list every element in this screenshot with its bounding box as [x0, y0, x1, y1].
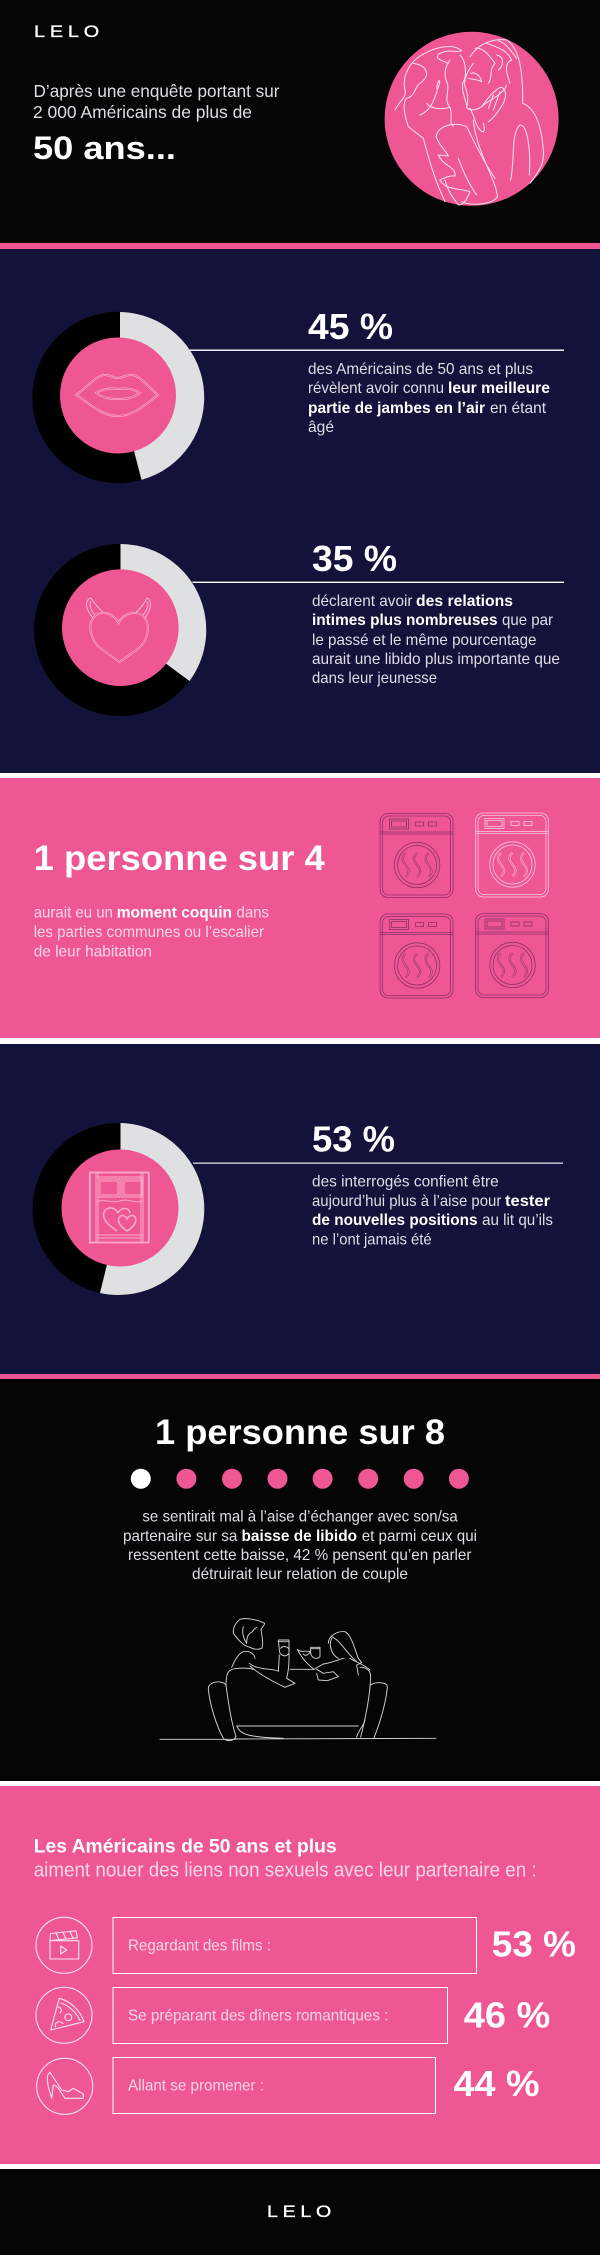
heading: 1 personne sur 4: 1 personne sur 4 — [34, 839, 325, 878]
logo: LELO: LELO — [34, 23, 104, 41]
text: moment coquin — [34, 905, 269, 961]
text: baisse de libido: détruirait leur relation de couple — [192, 1566, 408, 1583]
icon: pizza slice — [36, 1987, 92, 2043]
text: 35 % description: aurait une libido plus importante que — [312, 651, 560, 668]
label: dinners: Se préparant des dîners romantiques : — [128, 2008, 388, 2025]
icon: bed with hearts — [90, 1172, 149, 1242]
row: dinners — [36, 1987, 550, 2044]
heading: bonding: Les Américains de 50 ans et plus — [34, 1835, 337, 1857]
text: baisse de libido: partenaire sur sa — [123, 1528, 237, 1545]
text: 35 % description — [312, 593, 560, 687]
heading: bonding: aiment nouer des liens non sexuels avec leur partenaire en : — [34, 1860, 537, 1882]
text: 45 % description: partie de jambes en l’air — [308, 400, 485, 417]
text: moment coquin: aurait eu un — [34, 905, 113, 922]
divider: white band — [0, 1038, 600, 1044]
panel: footer — [0, 2169, 600, 2255]
rule — [192, 582, 564, 583]
text: 35 % description: des relations — [416, 593, 513, 610]
text: 53 % description: ne l’ont jamais été — [312, 1232, 432, 1249]
label: walks: Allant se promener : — [128, 2078, 264, 2095]
label: films: Regardant des films : — [128, 1938, 271, 1955]
text: 45 % description: en étant — [490, 400, 547, 417]
intro text: 2 000 Américains de plus de — [33, 102, 252, 122]
bar: films — [113, 1918, 476, 1974]
text: 45 % description — [308, 361, 550, 436]
text: baisse de libido — [123, 1509, 477, 1583]
text: 35 % description: le passé et le même pourcentage — [312, 632, 537, 649]
text: 53 % description: tester — [505, 1193, 550, 1210]
stat: 35 %: 35 % — [312, 538, 397, 579]
text: 35 % description: dans leur jeunesse — [312, 670, 437, 687]
text: 53 % description — [312, 1174, 553, 1249]
bar: walks — [113, 2058, 436, 2114]
divider: white band — [0, 773, 600, 778]
text: 53 % description: de nouvelles positions — [312, 1212, 478, 1229]
heading: 1 personne sur 8: 1 personne sur 8 — [155, 1413, 445, 1452]
heading: bonding — [34, 1835, 537, 1882]
illustration: kissing couple — [385, 32, 559, 206]
text: baisse de libido: baisse de libido — [242, 1528, 357, 1545]
logo: LELO: LELO — [267, 2203, 336, 2221]
text: baisse de libido: ressentent cette baisse, 42 % pensent qu’en parler — [128, 1547, 472, 1564]
text: 35 % description: intimes plus nombreuses — [312, 612, 498, 629]
text: moment coquin: les parties communes ou l’escalier — [34, 924, 265, 941]
intro text — [33, 81, 280, 122]
value: 46 %: 46 % — [464, 1994, 550, 2035]
icon: lips — [76, 375, 158, 416]
bar: dinners — [113, 1988, 448, 2044]
text: 35 % description: déclarent avoir — [312, 593, 413, 610]
text: 53 % description: aujourd’hui plus à l’aise pour — [312, 1193, 502, 1210]
rule — [193, 1162, 563, 1164]
text: baisse de libido: se sentirait mal à l’aise d’échanger avec son/sa — [142, 1509, 458, 1526]
donut chart: 35 % — [34, 544, 206, 716]
stat: 53 %: 53 % — [312, 1119, 395, 1160]
value: 53 %: 53 % — [492, 1924, 576, 1965]
row: films — [36, 1917, 576, 1974]
text: moment coquin: dans — [236, 905, 269, 922]
text: moment coquin: moment coquin — [117, 905, 232, 922]
text: 53 % description: des interrogés confient être — [312, 1174, 499, 1191]
text: 35 % description: que par — [502, 612, 554, 629]
value: 44 %: 44 % — [454, 2063, 540, 2104]
panel: header — [0, 0, 600, 249]
text: 45 % description: leur meilleure — [448, 380, 550, 397]
intro text: D’après une enquête portant sur — [34, 81, 280, 101]
stat: 45 %: 45 % — [308, 306, 393, 347]
text: baisse de libido: et parmi ceux qui — [362, 1528, 477, 1545]
text: 53 % description: au lit qu’ils — [482, 1212, 553, 1229]
panel: 1 personne sur 4 — [0, 778, 600, 1038]
icon: film clapper — [36, 1917, 92, 1973]
row: walks — [37, 2058, 539, 2114]
panel: 53 % — [0, 1044, 600, 1374]
icon grid: four washing machines — [380, 813, 548, 998]
icon: high heel — [37, 2058, 93, 2114]
panel: non-sexual bonding — [0, 1786, 600, 2164]
text: 45 % description: âgé — [308, 419, 334, 436]
rule — [189, 350, 564, 351]
heading: 50 ans: 50 ans... — [33, 130, 176, 166]
icon: devil heart — [87, 598, 151, 662]
divider: white band — [0, 2164, 600, 2169]
divider: white band — [0, 1781, 600, 1786]
illustration: couple on sofa — [160, 1619, 436, 1741]
divider: pink band — [0, 1374, 600, 1379]
panel: 1 personne sur 8 — [0, 1379, 600, 1781]
donut chart: 53 % — [33, 1123, 205, 1295]
text: moment coquin: de leur habitation — [34, 944, 152, 961]
panel: survey statistics — [0, 249, 600, 773]
donut chart: 45 % — [32, 312, 204, 483]
dot row: one in eight — [131, 1469, 469, 1489]
text: 45 % description: révèlent avoir connu — [308, 380, 444, 397]
text: 45 % description: des Américains de 50 ans et plus — [308, 361, 533, 378]
